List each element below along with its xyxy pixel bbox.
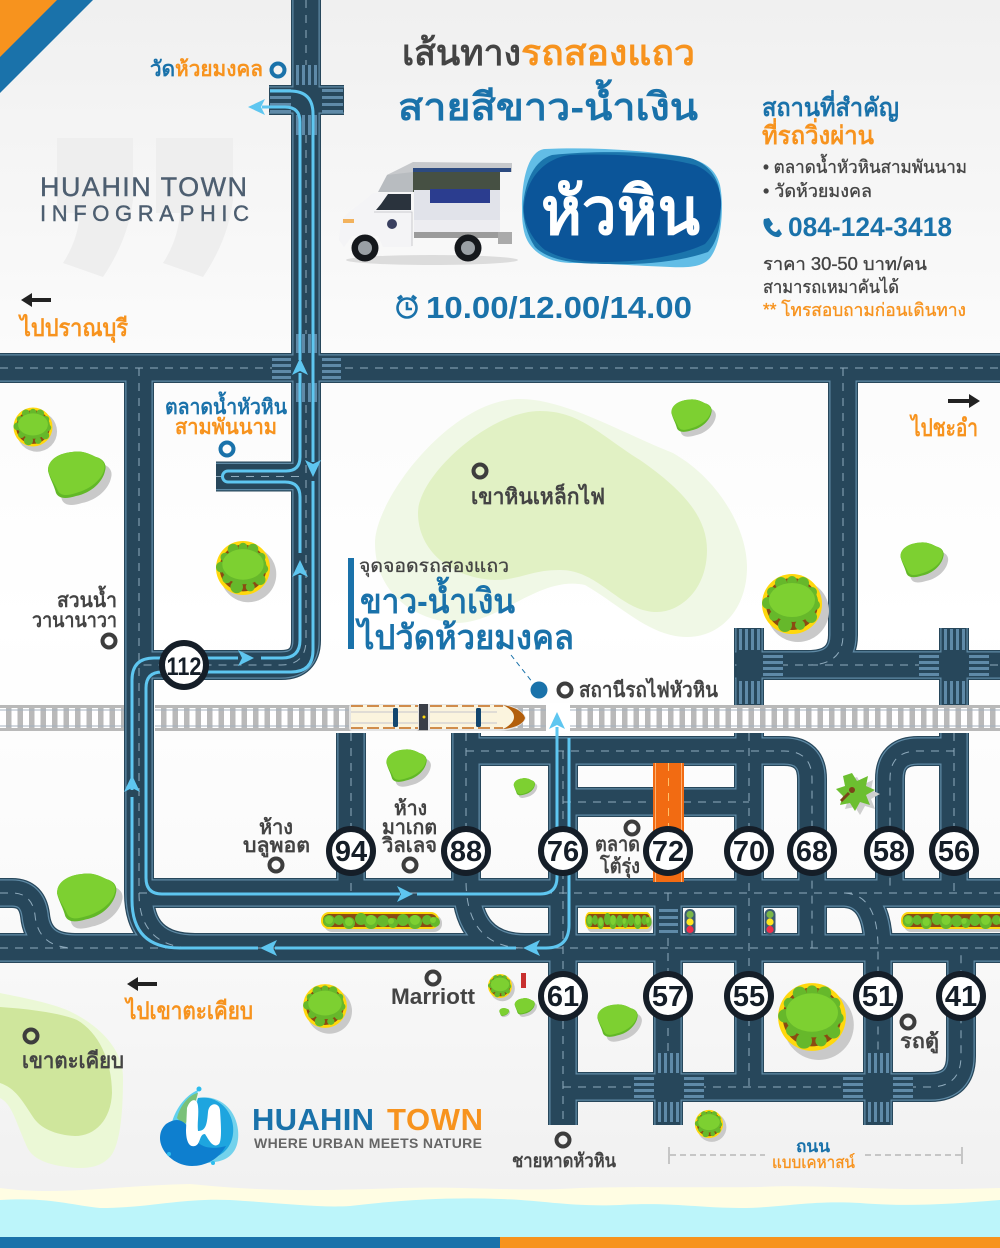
callout: songthaew stop: จุดจอดรถสองแถว	[359, 556, 509, 578]
place: Bluport	[243, 816, 310, 872]
61: 61	[547, 981, 579, 1013]
icon: alarm clock	[398, 296, 416, 318]
place: Khao Hin Lek Fai: เขาหินเหล็กไฟ	[471, 482, 605, 509]
place: Marriott	[391, 972, 476, 1009]
trees and planters	[13, 399, 1000, 1142]
place: Khao Hin Lek Fai	[471, 464, 605, 509]
68	[790, 829, 834, 873]
place: Wat Huai Mongkhon	[150, 57, 284, 81]
41: 41	[945, 981, 977, 1013]
logo: Huahin Town: TOWN	[387, 1102, 483, 1137]
title: สายสีขาว-น้ำเงิน	[398, 79, 698, 129]
place: van station: รถตู้	[900, 1030, 939, 1055]
direction: to Cha-am: ไปชะอำ	[909, 413, 978, 442]
112: 112	[166, 653, 202, 681]
junction fills	[269, 65, 989, 1125]
94	[329, 829, 373, 873]
place: Wat Huai Mongkhon: วัด	[150, 58, 175, 81]
place: van station	[900, 1016, 939, 1055]
badge: Hua Hin	[522, 148, 722, 267]
place: Tor Rung night market: ตลาด	[595, 834, 640, 856]
place: Tor Rung night market	[595, 822, 640, 879]
hill: Khao Hin Lek Fai	[375, 399, 747, 637]
88	[444, 829, 488, 873]
61	[541, 974, 585, 1018]
title	[398, 32, 698, 129]
51	[856, 974, 900, 1018]
railway track	[0, 705, 1000, 731]
direction: to Cha-am	[909, 394, 980, 442]
info panel: key places: • วัดห้วยมงคล	[763, 181, 872, 201]
small red sign	[521, 973, 526, 988]
info panel: key places: • ตลาดน้ำหัวหินสามพันนาม	[763, 154, 967, 177]
quote mark watermark	[57, 138, 233, 277]
title: เส้นทาง	[402, 32, 521, 73]
76: 76	[547, 836, 579, 868]
58	[867, 829, 911, 873]
title: รถสองแถว	[521, 32, 695, 73]
logo: Huahin Town: HUAHIN	[252, 1102, 374, 1137]
94: 94	[335, 836, 367, 868]
place: Tor Rung night market: โต้รุ่ง	[599, 854, 640, 879]
57: 57	[652, 981, 684, 1013]
72	[646, 829, 690, 873]
place: Hua Hin railway station: สถานีรถไฟหัวหิน	[579, 677, 719, 702]
white gap at the station	[546, 703, 570, 733]
place: Market Village: วิลเลจ	[381, 835, 437, 857]
info panel: key places: สถานที่สำคัญ	[762, 90, 899, 122]
place: Bluport: ห้าง	[259, 816, 293, 839]
place: Sam Phan Nam floating market: สามพันนาม	[175, 416, 277, 439]
info panel: key places: ราคา 30-50 บาท/คน	[763, 254, 927, 274]
legend: housing-estate road	[669, 1137, 962, 1172]
departure times: 10.00/12.00/14.00	[426, 290, 692, 325]
direction: to Khao Takiab: ไปเขาตะเคียบ	[123, 996, 253, 1025]
hill: Khao Takiab	[0, 993, 123, 1168]
logo: Huahin Town	[160, 1086, 483, 1166]
info panel: key places: ** โทรสอบถามก่อนเดินทาง	[763, 299, 966, 320]
place: Hua Hin beach: ชายหาดหัวหิน	[512, 1151, 616, 1172]
72: 72	[652, 836, 684, 868]
heading: Huahin Town Infographic	[40, 172, 249, 226]
logo: Huahin Town: WHERE URBAN MEETS NATURE	[254, 1135, 482, 1151]
palm tree	[836, 773, 880, 815]
info panel: key places	[762, 90, 967, 320]
place: Sam Phan Nam floating market	[165, 391, 288, 456]
place: Vana Nava water park: สวนน้ำ	[57, 585, 117, 612]
112	[162, 643, 206, 687]
place: Market Village: ห้าง	[394, 797, 427, 820]
legend: housing-estate road: แบบเคหาสน์	[772, 1153, 855, 1172]
direction: to Pranburi: ไปปราณบุรี	[17, 313, 128, 344]
heading: Huahin Town Infographic: HUAHIN TOWN	[40, 172, 247, 202]
70: 70	[733, 836, 765, 868]
direction: to Khao Takiab	[123, 977, 253, 1025]
traffic lights	[684, 909, 776, 935]
58: 58	[873, 836, 905, 868]
place: Wat Huai Mongkhon: ห้วยมงคล	[175, 57, 263, 81]
heading: Huahin Town Infographic: INFOGRAPHIC	[40, 201, 249, 226]
55	[727, 974, 771, 1018]
callout: songthaew stop	[348, 556, 574, 698]
place: Marriott: Marriott	[391, 984, 476, 1009]
orange road segment: soi 72	[653, 763, 684, 882]
41	[939, 974, 983, 1018]
footer bar	[0, 1237, 1000, 1248]
56: 56	[938, 836, 970, 868]
bus route: light blue lines and arrows	[124, 91, 569, 956]
place: Sam Phan Nam floating market: ตลาดน้ำหัวหิน	[165, 391, 288, 419]
place: Hua Hin beach	[512, 1134, 616, 1172]
place: Khao Takiab	[22, 1030, 124, 1073]
70	[727, 829, 771, 873]
place: Market Village: มาเกต	[382, 817, 437, 839]
place: Market Village	[381, 797, 437, 872]
direction: to Pranburi	[17, 293, 128, 344]
songthaew van photo	[339, 162, 518, 265]
place: Khao Takiab: เขาตะเคียบ	[22, 1048, 124, 1073]
icon: phone	[763, 218, 782, 237]
icon: water H	[160, 1086, 238, 1166]
88: 88	[450, 836, 482, 868]
51: 51	[862, 981, 894, 1013]
68: 68	[796, 836, 828, 868]
info panel: key places: สามารถเหมาคันได้	[763, 276, 899, 297]
sea and beach	[0, 1184, 1000, 1240]
legend: housing-estate road: ถนน	[796, 1137, 830, 1156]
place: Vana Nava water park: วานานาวา	[32, 610, 117, 632]
56	[932, 829, 976, 873]
route arrows	[124, 99, 565, 956]
crosswalks	[270, 65, 989, 1122]
callout: songthaew stop: ไปวัดห้วยมงคล	[355, 617, 574, 657]
corner ribbon	[0, 0, 93, 93]
57	[646, 974, 690, 1018]
place: Bluport: บลูพอต	[243, 835, 310, 859]
55: 55	[733, 981, 765, 1013]
76	[541, 829, 585, 873]
callout: songthaew stop: ขาว-น้ำเงิน	[360, 576, 515, 621]
place: Vana Nava water park	[32, 585, 117, 648]
train	[349, 704, 526, 731]
info panel: key places: 084-124-3418	[788, 212, 952, 242]
road number circles	[162, 643, 983, 1018]
info panel: key places: ที่รถวิ่งผ่าน	[762, 118, 874, 150]
badge: Hua Hin: หัวหิน	[541, 174, 700, 248]
